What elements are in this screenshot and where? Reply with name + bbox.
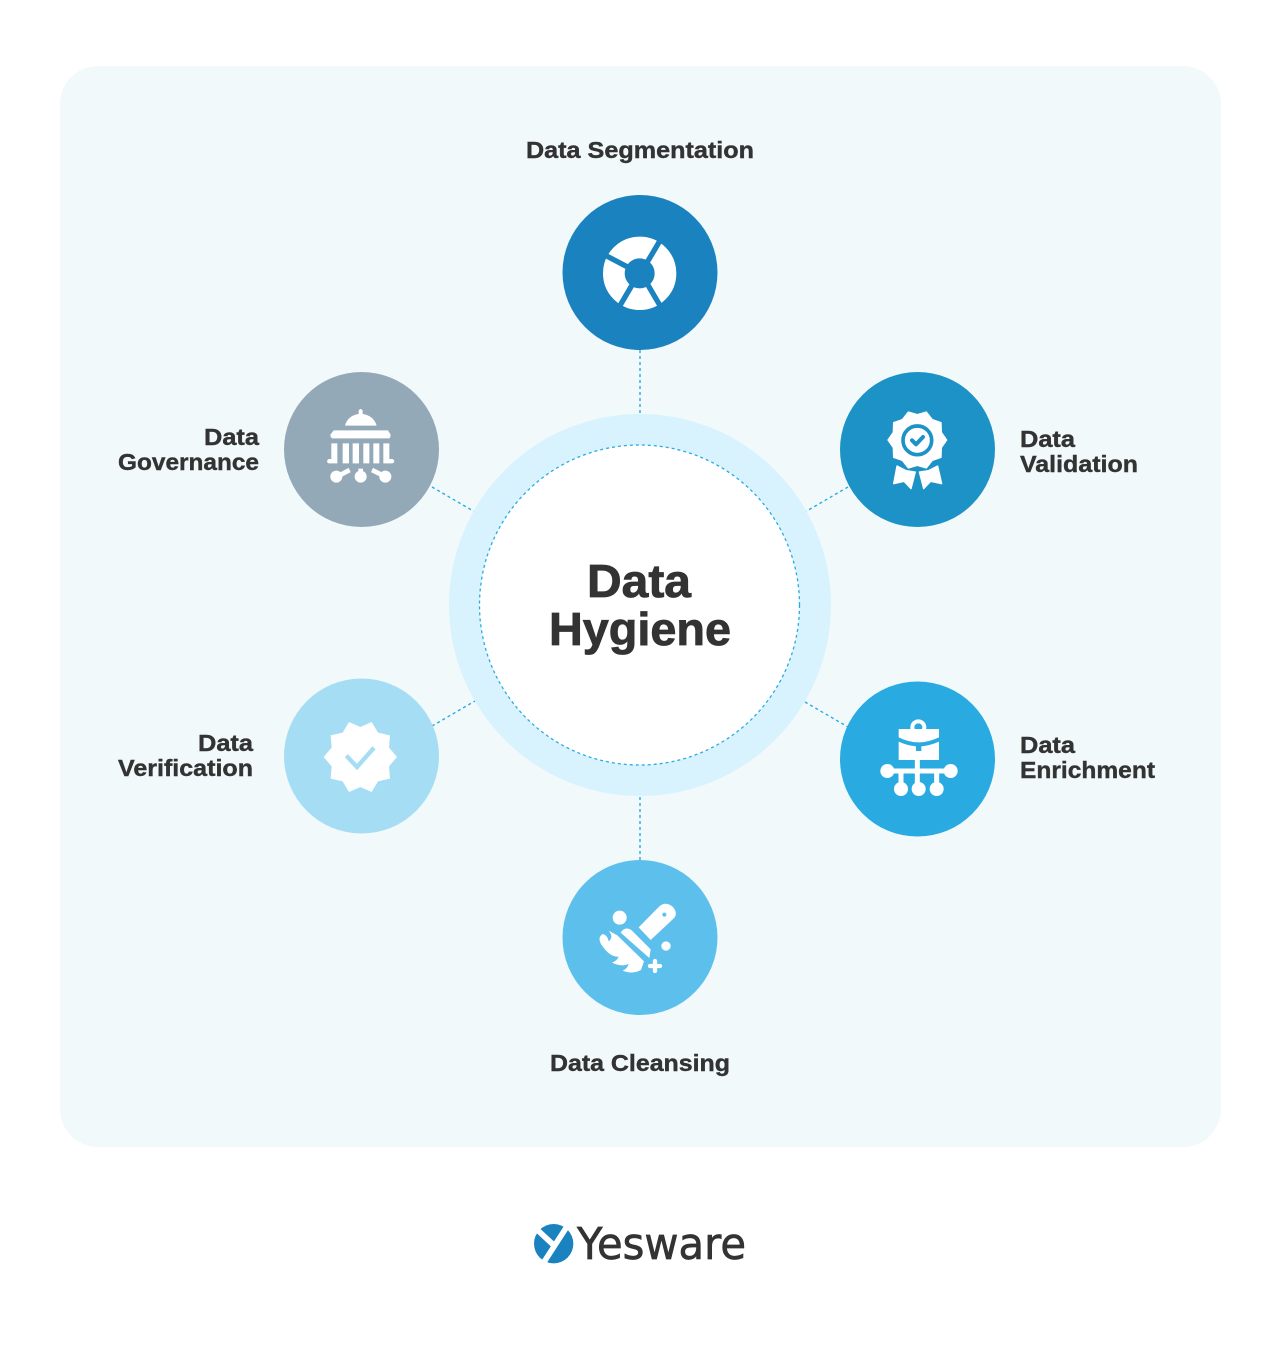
label: Data Validation <box>1020 426 1138 477</box>
node: Data Segmentation circle <box>562 195 718 350</box>
title: Data <box>587 555 691 607</box>
title: Hygiene <box>549 603 731 655</box>
label: Data Governance: Governance <box>118 449 259 475</box>
title <box>549 555 731 655</box>
label: Data Enrichment: Data <box>1020 732 1075 758</box>
label: Data Validation: Data <box>1020 426 1075 452</box>
icon: award ribbon badge <box>888 412 947 489</box>
panel: background <box>60 66 1221 1147</box>
node: Data Validation circle <box>840 372 995 527</box>
icon: government building network <box>327 409 394 483</box>
label: Data Verification <box>118 730 253 781</box>
label: Data Verification: Data <box>198 730 253 756</box>
connector lines <box>432 350 848 860</box>
label: Data Segmentation: Data Segmentation <box>526 137 754 163</box>
node: Data Governance circle <box>284 372 439 527</box>
icon: briefcase network <box>880 721 958 796</box>
node: Data Verification circle <box>284 678 439 834</box>
label: Data Governance: Data <box>204 424 259 450</box>
label: Data Enrichment <box>1020 732 1155 783</box>
logo mark <box>534 1224 573 1263</box>
logo: Yesware <box>534 1219 746 1270</box>
label: Data Verification: Verification <box>118 755 253 781</box>
icon: verified star <box>324 722 397 792</box>
node: Data Cleansing circle <box>562 860 718 1015</box>
label: Data Validation: Validation <box>1020 451 1138 477</box>
logo wordmark: Yesware <box>576 1219 746 1270</box>
central hub <box>449 414 831 796</box>
label: Data Cleansing: Data Cleansing <box>550 1050 730 1076</box>
node: Data Enrichment circle <box>840 682 995 836</box>
icon: cleaning brush <box>600 904 676 973</box>
label: Data Enrichment: Enrichment <box>1020 757 1155 783</box>
label: Data Governance <box>118 424 259 475</box>
icon: segmented donut <box>607 241 665 307</box>
